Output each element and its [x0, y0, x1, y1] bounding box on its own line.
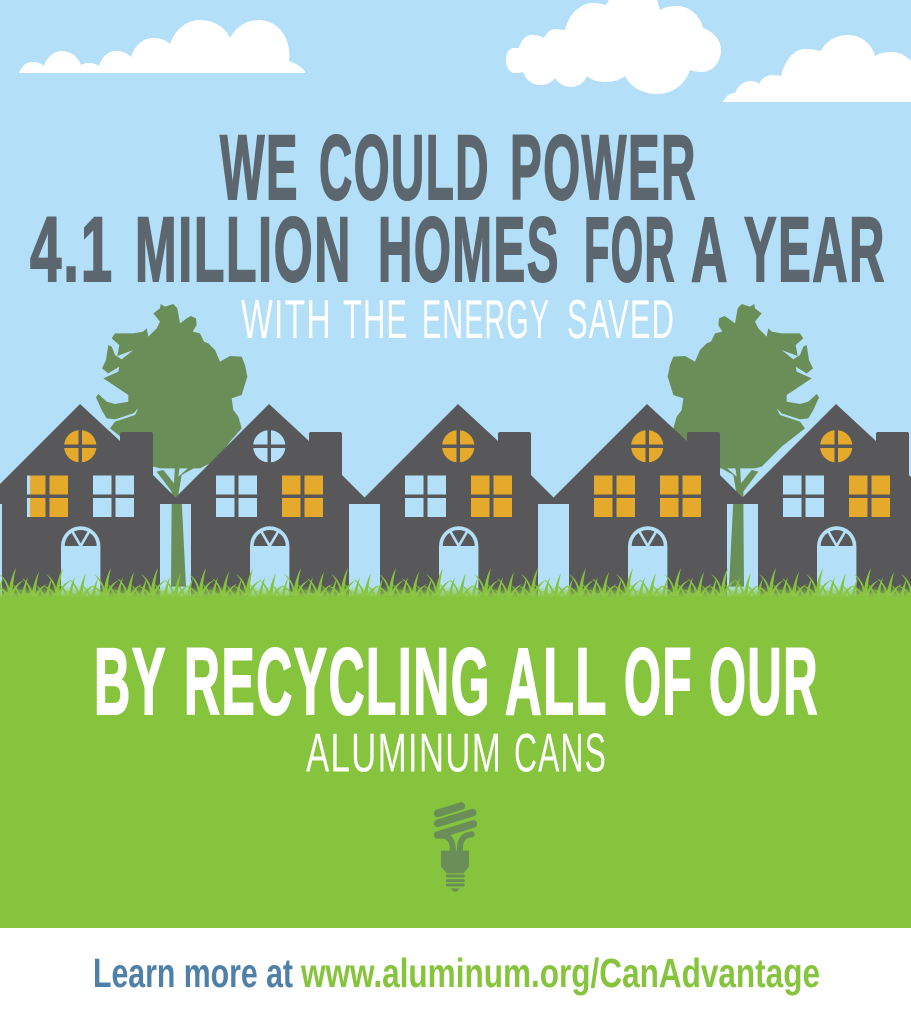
heading line 2: MILLION	[135, 199, 352, 301]
icon: light bulb	[438, 806, 473, 892]
grass blades	[0, 562, 911, 598]
lawn heading: ALL	[505, 629, 608, 735]
row of houses	[0, 404, 911, 600]
heading line 2: FOR	[584, 199, 676, 301]
heading line 1: COULD	[319, 117, 490, 219]
subheading: THE	[343, 288, 408, 350]
cloud: right	[723, 35, 911, 102]
sky background	[0, 0, 911, 600]
house 3	[358, 404, 560, 600]
footer panel	[0, 928, 911, 1024]
tree: left	[96, 304, 247, 587]
cloud: left	[19, 20, 306, 73]
subheading: ENERGY	[422, 288, 550, 350]
subheading: SAVED	[567, 288, 675, 350]
lawn heading: BY	[94, 629, 167, 735]
heading line 1: WE	[220, 117, 299, 219]
subheading: WITH	[241, 288, 332, 350]
tree: right	[668, 304, 819, 587]
lawn heading: RECYCLING	[184, 629, 491, 735]
lawn subheading: ALUMINUM	[306, 722, 502, 784]
green lawn panel	[0, 597, 911, 928]
house 1	[0, 404, 182, 600]
house 2	[169, 404, 371, 600]
house 5	[736, 404, 911, 600]
lawn heading: OF	[624, 629, 693, 735]
heading line 2: A	[691, 199, 729, 301]
footer: learn more: Learn more at	[93, 950, 293, 996]
house 4	[547, 404, 749, 600]
heading line 2: HOMES	[378, 199, 560, 301]
subheading	[241, 288, 675, 350]
heading line 1: POWER	[510, 117, 697, 219]
heading line 2: 4.1	[30, 199, 114, 301]
heading line 2	[30, 199, 886, 301]
lawn subheading: CANS	[514, 722, 607, 784]
cloud: center	[506, 0, 721, 94]
